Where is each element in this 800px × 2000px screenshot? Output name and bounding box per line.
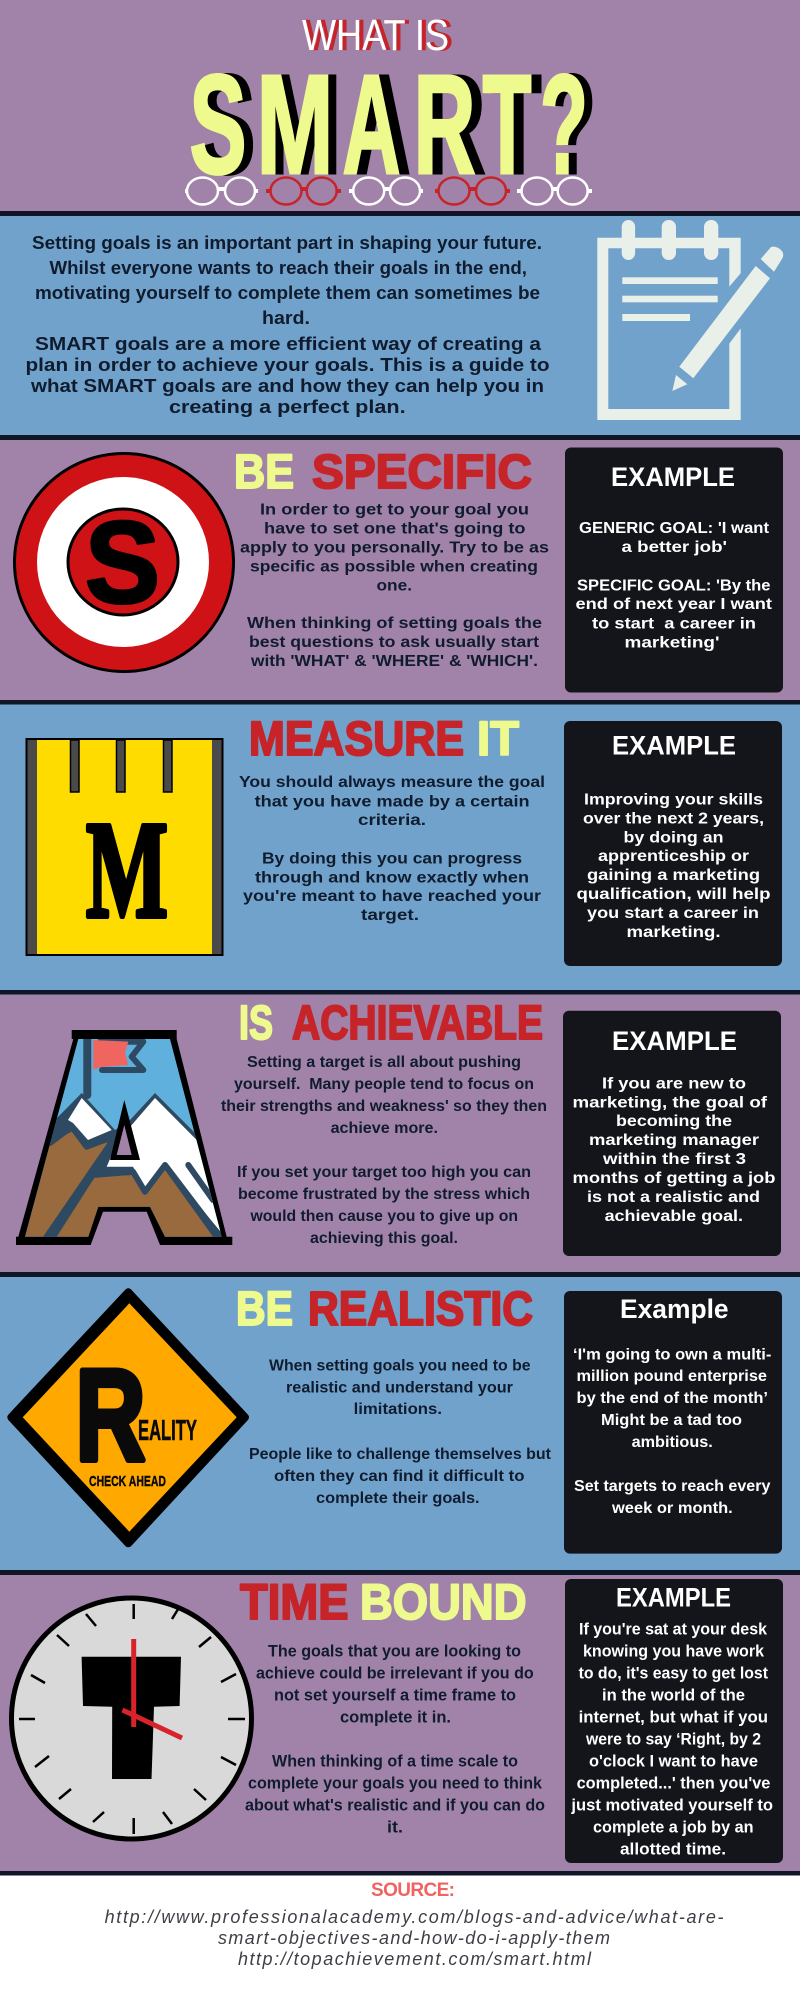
panel: realistic example: by the end of the month’ — [576, 1390, 768, 1407]
panel: achievable example: is not a realistic and — [587, 1189, 760, 1206]
text: realistic body — [249, 1358, 552, 1507]
title: SMART?: T — [492, 45, 542, 203]
text: specific body: best questions to ask usually start — [249, 634, 540, 651]
icon: reality check road sign: EALITY — [138, 1415, 197, 1447]
panel: specific example: EXAMPLE — [611, 462, 735, 492]
text: measure body: that you have made by a certain — [255, 793, 530, 810]
title: SMART?: R — [424, 45, 486, 203]
panel: realistic example: week or month. — [611, 1500, 733, 1517]
text: specific body: apply to you personally. Try to be as — [240, 540, 549, 556]
heading: is achievable — [239, 997, 543, 1050]
text: introduction — [26, 233, 550, 417]
panel: time bound example: o'clock I want to have — [589, 1752, 758, 1771]
panel: measure example: gaining a marketing — [587, 867, 760, 884]
panel: time bound example: completed...' then you've — [577, 1774, 770, 1793]
icon: mountain letter A — [16, 1030, 232, 1245]
text: achievable body: Setting a target is all about pushing — [247, 1054, 521, 1071]
text: specific body: specific as possible when creating — [250, 558, 538, 576]
title: SMART?: S — [198, 45, 256, 203]
text: source links: http://www.professionalacademy.com/blogs-and-advice/what-are- — [105, 1907, 724, 1927]
text: introduction: Setting goals is an important part in shaping your future. — [32, 233, 542, 253]
text: time bound body: complete it in. — [340, 1708, 451, 1727]
title: SMART?: A — [342, 45, 400, 203]
panel: time bound — [0, 1574, 800, 1871]
text: introduction: creating a perfect plan. — [169, 397, 406, 417]
text: introduction: hard. — [262, 308, 310, 328]
text: measure body: criteria. — [358, 812, 426, 829]
heading: is achievable: ACHIEVABLE — [292, 997, 543, 1050]
text: time bound body: The goals that you are looking to — [268, 1642, 521, 1661]
heading: be specific: SPECIFIC — [312, 446, 532, 499]
heading: time bound — [240, 1574, 526, 1630]
panel: realistic example: Set targets to reach every — [574, 1478, 770, 1495]
panel: realistic example: Example — [620, 1294, 729, 1324]
title: WHAT IS: WHAT IS — [302, 11, 449, 60]
text: introduction: Whilst everyone wants to reach their goals in the end, — [50, 258, 527, 278]
text: achievable body: achieving this goal. — [310, 1230, 458, 1247]
text: time bound body: not set yourself a time frame to — [274, 1686, 516, 1705]
text: specific body: with 'WHAT' & 'WHERE' & 'WHICH'. — [250, 653, 538, 670]
panel: measure example — [564, 721, 782, 966]
title: SMART?: R — [414, 45, 476, 203]
panel: realistic example — [564, 1291, 782, 1554]
panel: realistic example: million pound enterprise — [576, 1368, 767, 1385]
text: achievable body: become frustrated by the stress which — [238, 1186, 530, 1203]
text: measure body: By doing this you can progress — [262, 850, 522, 868]
panel: time bound example: knowing you have work — [583, 1642, 765, 1661]
title: SMART?: M — [264, 45, 342, 203]
panel: be specific — [0, 440, 800, 700]
text: realistic body: People like to challenge themselves but — [249, 1446, 552, 1463]
title: SMART?: ? — [540, 45, 588, 203]
icon: notepad and pencil — [597, 220, 783, 420]
heading: time bound: BOUND — [360, 1574, 526, 1630]
text: introduction: SMART goals are a more efficient way of creating a — [35, 334, 542, 354]
text: realistic body: complete their goals. — [316, 1490, 480, 1507]
panel: specific example — [565, 448, 783, 692]
panel: achievable example: achievable goal. — [605, 1208, 743, 1225]
panel: achievable example: within the first 3 — [602, 1151, 746, 1168]
text: time bound body: it. — [387, 1818, 403, 1837]
panel: time bound example: internet, but what if you — [579, 1708, 768, 1727]
text: achievable body: yourself. Many people tend to focus on — [234, 1076, 534, 1093]
panel: specific example: SPECIFIC GOAL: 'By the — [577, 577, 771, 594]
text: time bound body: about what's realistic and if you can do — [245, 1796, 545, 1815]
panel: specific example: GENERIC GOAL: 'I want — [579, 520, 770, 537]
panel: realistic example: ambitious. — [632, 1434, 713, 1451]
panel: measure example: marketing. — [626, 924, 720, 941]
icon: yellow ruler with M — [26, 739, 222, 955]
heading: be realistic: BE — [236, 1283, 293, 1336]
panel: time bound example: allotted time. — [620, 1840, 726, 1859]
panel: achievable example: marketing, the goal of — [572, 1094, 768, 1111]
text: realistic body: often they can find it difficult to — [274, 1468, 525, 1485]
panel: time bound example: in the world of the — [602, 1686, 745, 1705]
text: measure body: You should always measure the goal — [239, 774, 545, 791]
title: SMART? — [190, 45, 596, 203]
panel: measure example: Improving your skills — [584, 792, 763, 808]
icon: target with S — [14, 454, 234, 672]
panel: be realistic — [0, 1277, 800, 1570]
text: time bound body: achieve could be irrelevant if you do — [256, 1664, 534, 1683]
text: achievable body: would then cause you to give up on — [250, 1208, 518, 1225]
text: source links: http://topachievement.com/smart.html — [238, 1949, 592, 1969]
text: specific body: have to set one that's going to — [264, 521, 526, 538]
text: achievable body: their strengths and weakness' so they then — [221, 1098, 547, 1115]
panel: time bound example: complete a job by an — [593, 1818, 754, 1837]
panel: time bound example: EXAMPLE — [616, 1583, 731, 1613]
heading: be realistic — [236, 1283, 533, 1336]
panel: introduction — [0, 216, 800, 435]
panel: is achievable — [0, 994, 800, 1272]
text: source links: smart-objectives-and-how-do-i-apply-them — [218, 1928, 610, 1948]
panel: specific example: a better job' — [622, 539, 727, 556]
icon: reality check road sign: R — [76, 1342, 146, 1488]
panel: measure example: by doing an — [624, 829, 724, 846]
heading: is achievable: IS — [239, 997, 273, 1050]
text: time bound body: When thinking of a time scale to — [272, 1752, 518, 1771]
heading: be specific: BE — [234, 446, 294, 499]
panel: measure example: EXAMPLE — [612, 730, 736, 760]
panel: specific example: end of next year I want — [576, 596, 773, 613]
heading: measure it: IT — [477, 713, 519, 766]
panel: time bound example — [565, 1579, 783, 1863]
text: source label: SOURCE: — [371, 1880, 455, 1901]
panel: time bound example: were to say ‘Right, by 2 — [585, 1730, 761, 1749]
text: specific body: one. — [376, 577, 412, 594]
icon: reality check road sign — [11, 1292, 245, 1543]
panel: measure example: you start a career in — [587, 905, 759, 922]
panel: achievable example: months of getting a job — [572, 1170, 776, 1187]
panel: header — [0, 0, 800, 211]
text: introduction: plan in order to achieve your goals. This is a guide to — [26, 355, 550, 375]
text: source links — [105, 1907, 724, 1969]
title: SMART?: A — [352, 45, 410, 203]
panel: achievable example: If you are new to — [602, 1076, 746, 1093]
icon: yellow ruler with M: M — [86, 794, 168, 948]
icon: reality check road sign: CHECK AHEAD — [89, 1473, 166, 1490]
heading: time bound: TIME — [240, 1574, 348, 1630]
title: SMART?: M — [256, 45, 334, 203]
text: measure body: target. — [361, 907, 419, 924]
text: achievable body: achieve more. — [331, 1120, 438, 1137]
text: introduction: motivating yourself to complete them can sometimes be — [35, 283, 540, 303]
text: specific body: When thinking of setting goals the — [247, 615, 542, 632]
icon: clock with T — [12, 1598, 252, 1839]
panel: time bound example: just motivated yourself to — [570, 1796, 773, 1815]
panel: achievable example: EXAMPLE — [612, 1026, 737, 1056]
text: measure body: through and know exactly when — [255, 869, 529, 886]
panel: achievable example: becoming the — [616, 1113, 732, 1130]
text: realistic body: When setting goals you need to be — [269, 1358, 531, 1375]
text: specific body: In order to get to your goal you — [260, 501, 529, 518]
panel: achievable example: marketing manager — [589, 1132, 759, 1149]
text: time bound body: complete your goals you need to think — [248, 1774, 543, 1793]
text: time bound body — [245, 1642, 545, 1837]
text: achievable body: If you set your target too high you can — [237, 1164, 531, 1181]
panel: time bound example: to do, it's easy to get lost — [579, 1664, 768, 1683]
panel: time bound example: If you're sat at your desk — [579, 1620, 768, 1639]
title: SMART?: ? — [548, 45, 596, 203]
panel: sources — [105, 1880, 724, 1969]
panel: measure example: qualification, will help — [576, 886, 771, 903]
text: realistic body: limitations. — [354, 1401, 442, 1418]
text: measure body: you're meant to have reached your — [243, 888, 541, 905]
text: measure body — [239, 774, 545, 924]
text: specific body — [240, 501, 549, 670]
panel: specific example: marketing' — [624, 634, 720, 652]
icon: target with S: S — [85, 498, 160, 628]
text: realistic body: realistic and understand your — [286, 1380, 513, 1397]
title: SMART?: T — [482, 45, 532, 203]
panel: realistic example: ‘I'm going to own a multi- — [573, 1346, 771, 1363]
panel: realistic example: Might be a tad too — [601, 1412, 742, 1429]
text: introduction: what SMART goals are and how they can help you in — [30, 376, 544, 396]
heading: be realistic: REALISTIC — [308, 1283, 533, 1336]
panel: measure example: over the next 2 years, — [583, 810, 764, 828]
text: achievable body — [221, 1054, 547, 1247]
panel: measure example: apprenticeship or — [598, 848, 749, 865]
heading: measure it: MEASURE — [249, 713, 464, 766]
panel: achievable example — [563, 1011, 781, 1256]
panel: measure it — [0, 704, 800, 990]
panel: specific example: to start a career in — [592, 616, 756, 632]
title: WHAT IS: WHAT IS — [306, 11, 453, 60]
title: SMART?: S — [190, 45, 246, 203]
icon: row of glasses — [185, 178, 592, 204]
